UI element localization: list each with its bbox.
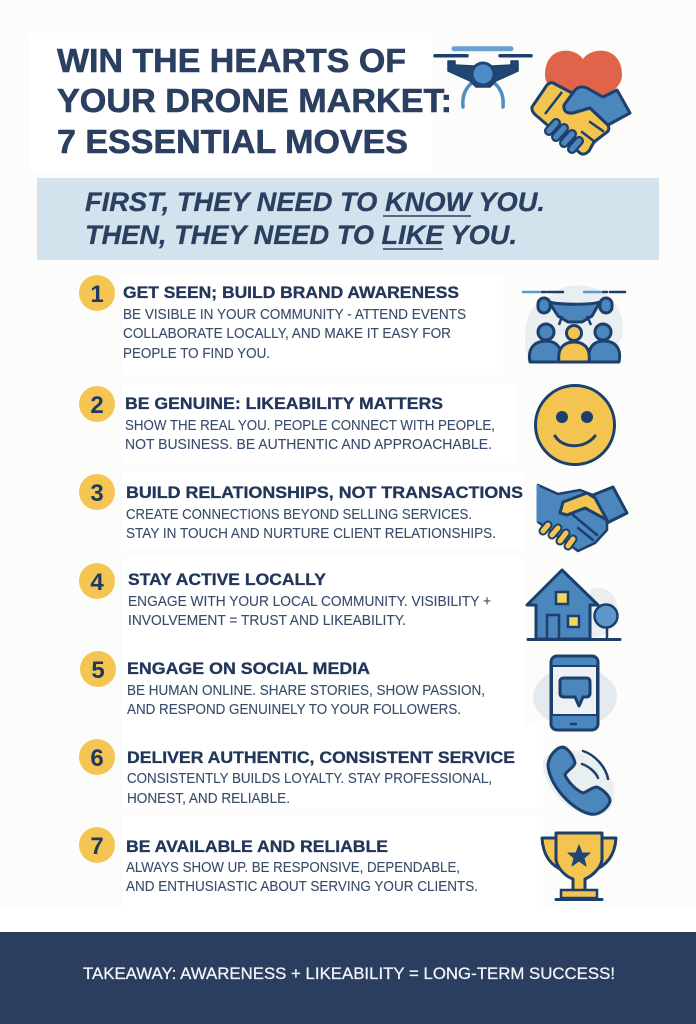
icon: drone over people xyxy=(523,286,625,362)
icon: handshake xyxy=(538,485,627,551)
footer: TAKEAWAY: AWARENESS + LIKEABILITY = LONG-TERM SUCCESS! xyxy=(83,964,615,983)
step 7: ALWAYS SHOW UP. BE RESPONSIVE, DEPENDABLE, xyxy=(126,860,460,876)
step 2: NOT BUSINESS. BE AUTHENTIC AND APPROACHABLE. xyxy=(125,437,492,453)
step 4: STAY ACTIVE LOCALLY xyxy=(128,570,327,589)
step 7 xyxy=(79,827,478,895)
step 5: BE HUMAN ONLINE. SHARE STORIES, SHOW PASSION, xyxy=(127,683,485,699)
step 7: BE AVAILABLE AND RELIABLE xyxy=(126,837,388,856)
title: WIN THE HEARTS OF xyxy=(57,42,406,79)
icon: smiley xyxy=(536,386,614,464)
icon: phone with chat bubble xyxy=(533,656,617,730)
step 3: BUILD RELATIONSHIPS, NOT TRANSACTIONS xyxy=(126,483,523,502)
step 6: CONSISTENTLY BUILDS LOYALTY. STAY PROFESSIONAL, xyxy=(127,771,492,787)
step 3: 3 xyxy=(90,480,104,507)
step 2: BE GENUINE: LIKEABILITY MATTERS xyxy=(125,394,443,413)
step 7: AND ENTHUSIASTIC ABOUT SERVING YOUR CLIENTS. xyxy=(126,879,478,895)
step 1: GET SEEN; BUILD BRAND AWARENESS xyxy=(123,283,459,302)
step 2: 2 xyxy=(90,392,104,419)
step 6 xyxy=(79,739,515,807)
icon: house and tree xyxy=(527,570,620,640)
step 1: PEOPLE TO FIND YOU. xyxy=(123,346,270,362)
step 2: SHOW THE REAL YOU. PEOPLE CONNECT WITH PEOPLE, xyxy=(125,418,495,434)
icon: trophy xyxy=(542,833,616,900)
icon: telephone xyxy=(543,747,614,816)
step 1: BE VISIBLE IN YOUR COMMUNITY - ATTEND EVENTS xyxy=(123,307,466,323)
footer xyxy=(0,932,696,1024)
icon: header drone xyxy=(435,49,531,107)
step 2 xyxy=(79,386,495,453)
step 7: 7 xyxy=(90,833,104,860)
step 5 xyxy=(80,651,485,718)
step 5: 5 xyxy=(91,657,105,684)
step 5: AND RESPOND GENUINELY TO YOUR FOLLOWERS. xyxy=(127,702,461,718)
step 4 xyxy=(79,563,491,629)
step 6: 6 xyxy=(90,745,104,772)
step 1: 1 xyxy=(90,281,104,308)
step 4: INVOLVEMENT = TRUST AND LIKEABILITY. xyxy=(128,613,406,629)
step 1: COLLABORATE LOCALLY, AND MAKE IT EASY FOR xyxy=(123,326,451,342)
step 6: HONEST, AND RELIABLE. xyxy=(127,791,290,807)
title: 7 ESSENTIAL MOVES xyxy=(57,123,408,160)
banner xyxy=(37,178,659,260)
banner: THEN, THEY NEED TO LIKE YOU. xyxy=(85,220,517,250)
step 3: CREATE CONNECTIONS BEYOND SELLING SERVICES. xyxy=(126,507,472,523)
title xyxy=(57,42,452,160)
step 3 xyxy=(79,474,523,542)
icon: heart and handshake xyxy=(532,51,630,154)
step 1 xyxy=(79,275,466,362)
banner: FIRST, THEY NEED TO KNOW YOU. xyxy=(85,187,545,217)
step 4: 4 xyxy=(90,569,104,596)
step 4: ENGAGE WITH YOUR LOCAL COMMUNITY. VISIBILITY + xyxy=(128,594,491,610)
title: YOUR DRONE MARKET: xyxy=(57,82,452,119)
step 3: STAY IN TOUCH AND NURTURE CLIENT RELATIONSHIPS. xyxy=(126,526,496,542)
step 6: DELIVER AUTHENTIC, CONSISTENT SERVICE xyxy=(127,748,515,767)
step 5: ENGAGE ON SOCIAL MEDIA xyxy=(127,659,370,678)
